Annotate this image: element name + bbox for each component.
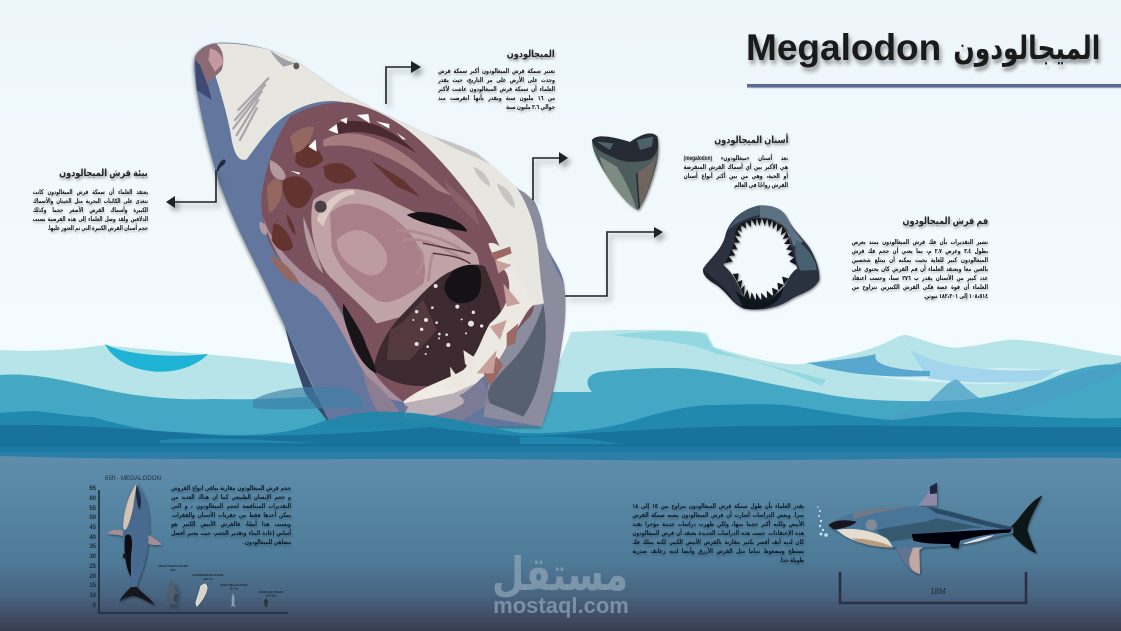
text: about megalodon: حوالي ٢.٦ مليون سنة — [506, 104, 555, 111]
dots — [412, 284, 483, 355]
size comparison chart — [89, 475, 288, 613]
snout mauve — [195, 44, 223, 85]
arrow: to description — [386, 61, 421, 104]
human silhouette — [264, 598, 268, 607]
white upper head — [210, 43, 544, 305]
text: about megalodon: من ١٦ مليون سنة ويقدر بأنها انقرضت منذ — [438, 95, 555, 102]
upper palate ridge — [323, 133, 453, 197]
text: about megalodon: تعتبر سمكة قرش الميغالودون أكبر سمكة قرش — [438, 68, 555, 75]
y axis ticks: 20 — [89, 574, 97, 580]
heading: jaw: فم قرش الميجالودون — [902, 216, 988, 227]
main title: الميجالودون — [953, 30, 1100, 66]
y axis ticks: 30 — [89, 554, 97, 560]
pectoral fin — [893, 538, 920, 574]
text: about megalodon — [438, 66, 556, 114]
comparison labels: GREAT WHITE SHARK — [158, 564, 188, 568]
y axis ticks: 35 — [89, 544, 97, 550]
gum mottling — [272, 144, 357, 251]
comparison labels: 6ft 7in — [230, 586, 238, 590]
text: size comparison: يمكن أخذها فقط من حفريات الأسنان والفقرات. — [171, 512, 291, 519]
lower left lip mauve — [262, 213, 403, 402]
front waves — [0, 387, 1121, 470]
watermark arabic: مستقل — [492, 547, 628, 601]
y axis ticks: 50 — [89, 515, 97, 521]
thick lower gum — [403, 320, 512, 403]
comparison labels: 5ft 10in — [266, 594, 276, 598]
text: length: مترا. وبعض الدراسات أشارت أن قرش الميغالودون يشبه سمكة القرش — [632, 512, 804, 519]
text: size comparison: التقديرات المتناقضة لحجم الميغالودون ، و التي — [171, 503, 291, 510]
baby megalodon silhouette — [231, 593, 236, 607]
vertical megalodon — [108, 483, 162, 605]
text: length: الأبيض ولكنه أكبر حجما منها، ولكن ظهرت دراسات حديثة مؤخرا تفند — [632, 521, 804, 528]
great white silhouette — [165, 579, 178, 606]
gill lines — [233, 78, 268, 140]
hammerhead silhouette — [196, 584, 207, 606]
text: jaw: الميغالودون كبير للغاية بحيث يمكنه أن يبتلع شخصين — [852, 257, 988, 264]
text: habitat: يعتقد العلماء أن سمكة قرش الميغالودون كانت — [33, 189, 148, 196]
text: about megalodon: العلماء أن سمكة قرش الميغالودون عاشت لأكثر — [438, 86, 555, 93]
comparison labels: BABY MEGALODON — [220, 583, 248, 587]
text: length: يقدر العلماء بأن طول سمكة قرش الميغالودون يتراوح بين ١٥ إلى ١٨ — [632, 503, 804, 510]
y axis ticks: 60 — [89, 496, 97, 502]
eye — [293, 63, 299, 69]
throat — [373, 265, 502, 386]
upper palate folds — [397, 230, 467, 280]
y axis ticks: 45 — [89, 525, 97, 531]
y axis ticks: 10 — [89, 593, 97, 599]
black lens — [407, 212, 467, 232]
main title: Megalodon — [746, 27, 941, 68]
deep water panel — [0, 455, 1121, 631]
text: teeth: القرش رواجًا في العالم — [734, 182, 788, 189]
comparison labels: 14ft 1in — [203, 577, 213, 581]
text: size comparison: حجم قرش الميغالودون مقارنة بباقي انواع القروش — [171, 485, 291, 492]
text: jaw: تشير التقديرات بأن فك قرش الميغالودون يمتد بعرض — [852, 239, 988, 246]
y axis ticks: 25 — [89, 564, 97, 570]
text: length: هذه الإعتقادات. حسب هذه الدراسات الجديدة يعتقد أن قرش الميغالودون — [632, 530, 804, 537]
comparison labels: AVERAGE HUMAN — [259, 590, 283, 594]
title underline — [747, 84, 1121, 88]
chart title: 65ft - MEGALODON — [105, 475, 161, 482]
surface ripple band — [0, 452, 1121, 460]
text: teeth: تعد أسنان «ميغالودون» (megalodon) — [684, 155, 788, 162]
text: teeth: أو الحية، وهي من بين أكثر أنواع أسنان — [684, 173, 788, 180]
text: size comparison: مضاهي للميغالودون . — [242, 539, 291, 546]
text: length: كان لديه أنف أقصر بكثير مقارنة بالقرش الأبيض الكبير. لكنه يملك فك — [632, 539, 804, 546]
heading: teeth: أسنان الميجالودون — [714, 135, 788, 146]
back waves — [0, 330, 1121, 470]
text: jaw: العلماء أن قوة عضة فكي القرش الكبيرين تتراوح من — [852, 284, 988, 291]
top teeth — [290, 114, 406, 175]
text: habitat — [33, 188, 150, 234]
black flank — [912, 529, 1012, 549]
icon: fossil tooth — [592, 134, 658, 210]
text: jaw: ١٠٨،٥١٤ إلى ١٨٢،٢٠١ نيوتن. — [924, 293, 988, 300]
belly white — [837, 529, 893, 547]
side view shark — [828, 483, 1042, 574]
giant shark breaching — [194, 43, 565, 427]
comparison labels: HAMMERHEAD SHARK — [192, 573, 224, 577]
text: size comparison: أساس إعادة البناء وتقدير الحجم، حيث يعتبر أفضل — [171, 530, 291, 537]
watermark latin: mostaql.com — [493, 593, 629, 618]
sky background — [0, 0, 1121, 470]
text: jaw: عدد كبير من الأسنان يقدر ب ٢٧٦ سنا، وحسب اعتقاد — [852, 275, 988, 282]
main title — [746, 27, 1102, 74]
text: jaw: بطول ٣.٤ وعرض ٢.٧ م، بما يعني أن حجم فك قرش — [852, 248, 988, 255]
scale label: 18M — [930, 587, 946, 596]
text: habitat: حجم أسنان القرش الكبيرة التي تم العثور عليها. — [48, 225, 148, 232]
arrow: to habitat — [166, 170, 216, 208]
icon: shark jaw — [703, 205, 819, 310]
tail — [1010, 495, 1042, 553]
y axis ticks: 65 — [89, 486, 97, 492]
y axis ticks: 15 — [89, 583, 97, 589]
bubbles — [817, 506, 828, 537]
mouth cavity — [261, 102, 534, 402]
text: teeth: هي الأكبر بين أي أسماك القرش المنقرضة — [684, 164, 788, 171]
text: habitat: الدلافين ولقد وصل العلماء إلى هذه الفرضية بسبب — [33, 216, 148, 223]
black left recess — [343, 303, 377, 373]
chin white patch — [403, 386, 464, 418]
y axis ticks: 40 — [89, 535, 97, 541]
cyan crest — [105, 344, 208, 372]
arrow: to tooth — [533, 152, 568, 200]
text: jaw: بالغين معا ويعتقد العلماء أن فم القرش كان يحتوي على — [852, 266, 988, 273]
snout — [828, 520, 857, 529]
grey right flank — [483, 190, 565, 427]
jaw teeth — [725, 218, 797, 302]
y axis ticks: 55 — [89, 506, 97, 512]
dorsal fin — [918, 483, 937, 506]
text: jaw — [852, 238, 990, 302]
scale bracket — [840, 572, 1026, 603]
lower teeth — [450, 350, 473, 390]
text: length: مسطح ومضغوط تماما مثل القرش الأزرق وأيضا لديه زعانف صدرية — [632, 548, 804, 555]
text: habitat: الكبيرة وأسماك القرش الأصغر حجما وكذلك — [33, 207, 148, 214]
head grey shading — [433, 137, 515, 208]
shark body — [828, 507, 1013, 548]
y axis ticks — [89, 486, 97, 609]
text: size comparison: ويسبب هذا أيضًا، فالقرش الأبيض الكبير هو — [171, 521, 291, 528]
palate light area — [311, 189, 480, 323]
comparison labels — [158, 564, 283, 598]
arrow: to jaw — [565, 227, 663, 296]
lower right gums — [403, 243, 537, 407]
text: teeth — [684, 154, 790, 192]
text: length: طويلة جدا. — [780, 557, 804, 564]
text: habitat: تتغذى على الكائنات البحرية مثل الحيتان والأسماك — [33, 198, 148, 205]
chart axes — [99, 490, 288, 613]
text: size comparison — [170, 485, 292, 548]
nostril marks — [217, 159, 226, 172]
comparison labels: 20ft — [171, 568, 176, 572]
text: about megalodon: وجدت على الأرض على مر التاريخ، حيث يقدر — [438, 77, 555, 84]
dark left belly edge — [285, 327, 330, 423]
heading: habitat: بيئة قرش الميجالودون — [59, 168, 148, 179]
y axis ticks: 5 — [93, 603, 97, 609]
text: size comparison: و حجم الإنسان الطبيعي كما ان هناك العديد من — [171, 494, 291, 501]
shark silhouette — [194, 43, 565, 427]
heading: megalodon: الميجالودون — [507, 49, 555, 60]
text: length — [632, 502, 805, 566]
